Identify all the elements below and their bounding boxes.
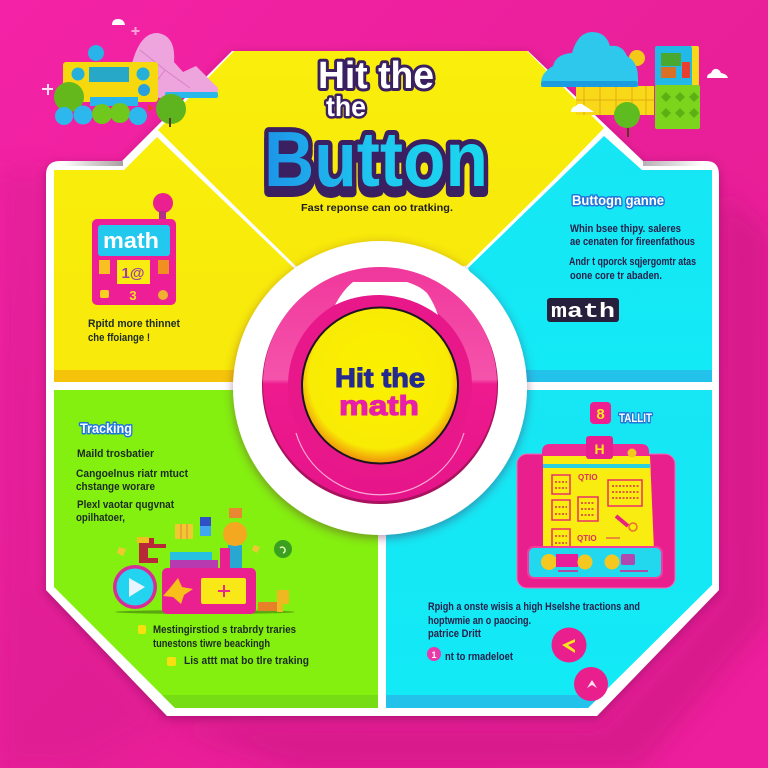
text: right panel (569, 223, 696, 282)
badge: number 8: TALLIT (619, 411, 653, 425)
text: tracking panel: opilhatoer, (76, 512, 125, 524)
icon: round up button (574, 667, 608, 701)
pink rim (262, 268, 498, 504)
text: lower right panel: nt to rmadeloet (445, 651, 513, 663)
illustration: tablet (517, 436, 675, 588)
text: right panel: Whin bsee thipy. saleres (570, 223, 681, 235)
panel: outer white frame (46, 51, 719, 716)
text: right panel: oone core tr abaden. (570, 270, 662, 282)
text: tracking panel: chstange worare (76, 481, 155, 493)
illustration: top right scene (541, 32, 728, 137)
text: tracking panel: Plexl vaotar qugvnat (77, 499, 174, 511)
list: tracking bullets: Lis attt mat bo tlre traking (184, 655, 309, 667)
text: tracking panel: Maild trosbatier (77, 448, 155, 460)
illustration: tablet: QTIO (577, 534, 597, 543)
text: lower right panel: hoptwmie an o paocing. (428, 615, 531, 627)
title: Hit the (318, 55, 434, 97)
panel: lower left green tracking (54, 390, 378, 708)
text: lower right panel: Rpigh a onste wisis a high Hselshe tractions and (428, 601, 640, 613)
icon: math machine: 3 (129, 288, 137, 303)
title: Button (264, 115, 488, 203)
list: tracking bullets: tunestons tiwre beackingh (153, 638, 270, 650)
text: tracking panel: Cangoelnus riatr mtuct (76, 468, 188, 480)
badge: number 8: 8 (596, 406, 605, 423)
yellow cap (301, 306, 459, 464)
panel: top yellow title (157, 51, 604, 268)
icon: math machine: 1@ (122, 265, 144, 282)
panel: lower right cyan (386, 390, 712, 708)
text: right panel: Andr t qporck sqjergomtr atas (569, 256, 696, 268)
label: math (547, 298, 619, 324)
panel: left yellow math (54, 137, 296, 389)
list: tracking bullets (138, 624, 309, 667)
heading: button game: Buttogn ganne (572, 192, 664, 208)
rim highlight (335, 282, 438, 315)
text: right panel: ae cenaten for fireenfathous (570, 236, 695, 248)
text: left panel: che ffoiange ! (88, 332, 150, 344)
white ring (233, 241, 527, 535)
text: tracking panel (76, 448, 188, 524)
icon: numbered bullet (427, 647, 441, 661)
big button: math (339, 390, 419, 421)
button label: Hit the (335, 363, 425, 393)
title (264, 55, 488, 209)
illustration: tablet: H (594, 441, 605, 457)
illustration: top left scene (42, 19, 218, 127)
heading: tracking: Tracking (80, 420, 132, 436)
label: math: math (551, 301, 615, 324)
panel: right cyan button game (468, 136, 712, 382)
text: left panel (88, 318, 180, 344)
big button (233, 241, 527, 535)
text: lower right panel: patrice Dritt (428, 628, 481, 640)
title: Button (264, 121, 488, 209)
icon: math machine (92, 193, 176, 305)
illustration: tablet: QTIO (578, 473, 598, 482)
icon: round back button (552, 628, 586, 662)
badge: number 8 (590, 402, 653, 425)
title: the (326, 91, 366, 122)
icon: math machine: math (103, 228, 159, 253)
text: left panel: Rpitd more thinnet (88, 318, 180, 330)
illustration: play and game console (113, 508, 295, 614)
list: tracking bullets: Mestingirstiod s trabrdy traries (153, 624, 296, 636)
subtitle: Fast reponse can oo tratking. (301, 202, 453, 214)
text: lower right panel (428, 601, 640, 663)
icon: numbered bullet: 1 (431, 650, 437, 660)
